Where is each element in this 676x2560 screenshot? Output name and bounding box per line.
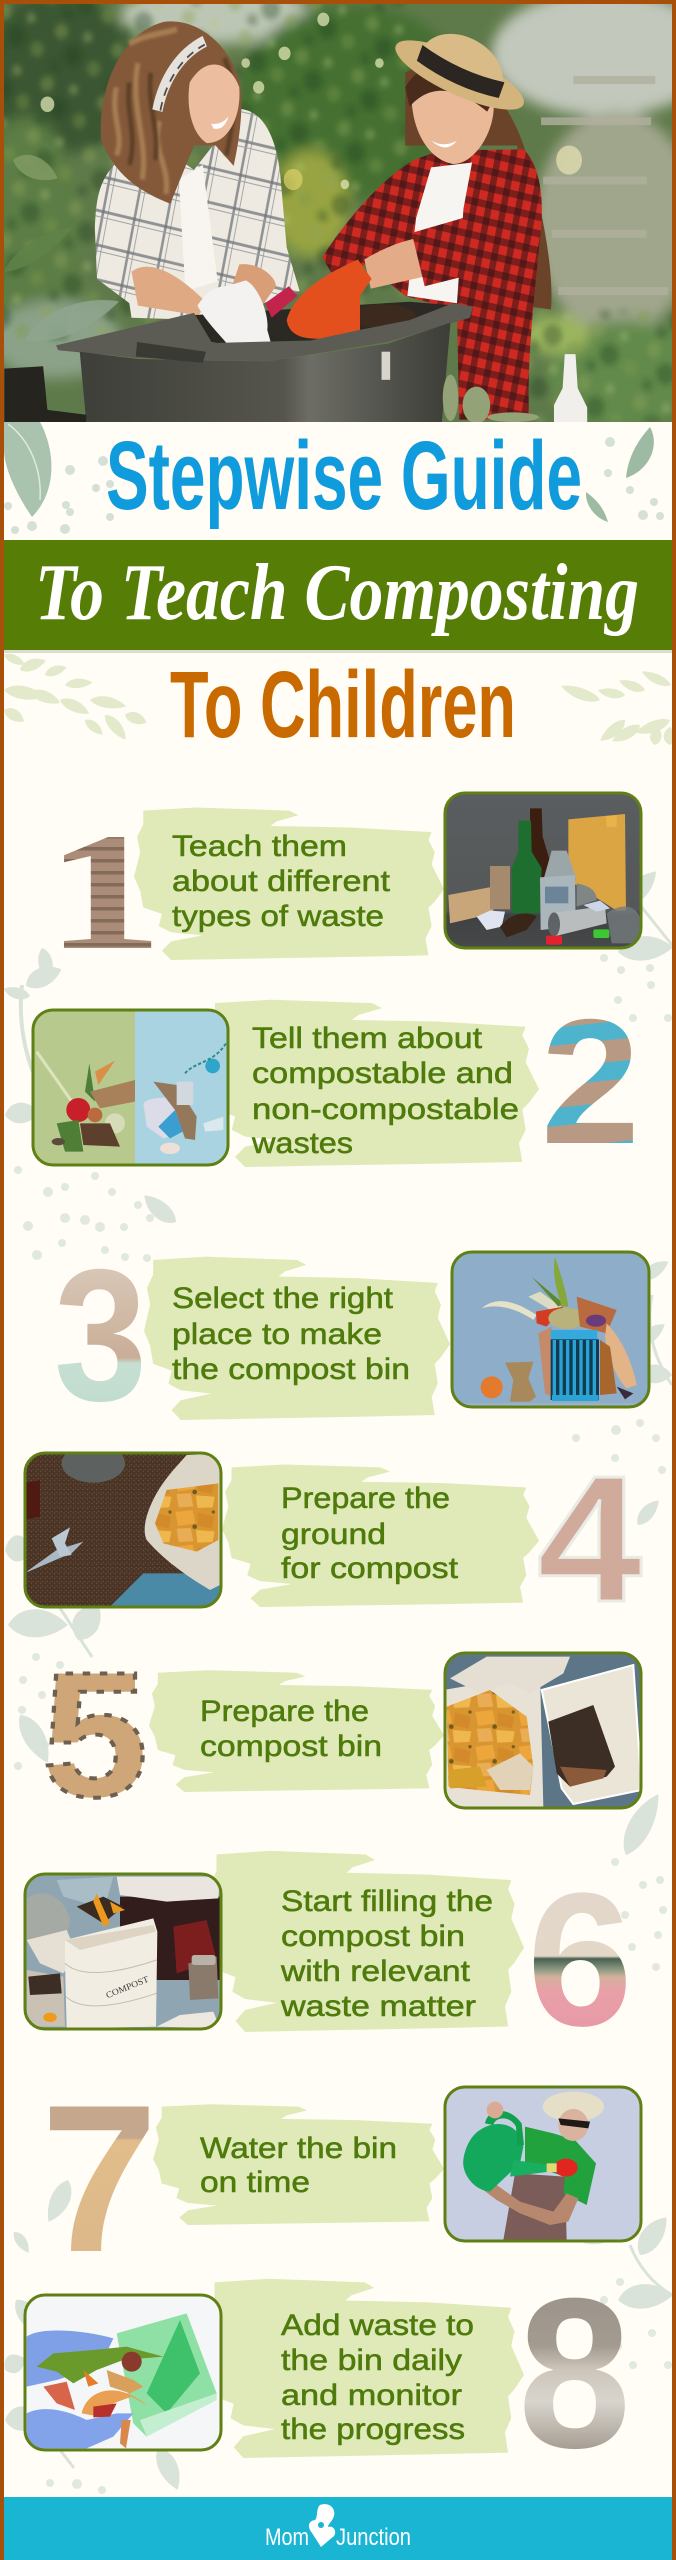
number 2: 2 [541,982,640,1181]
brush stroke [134,808,444,960]
brush stroke [205,2279,524,2458]
step text: and monitor [281,2379,462,2412]
footer [4,2497,672,2560]
photo: woman with watering can [443,2085,643,2245]
step text: waste matter [280,1990,476,2023]
plants and spray bottle [443,374,539,423]
step text: the compost bin [172,1353,410,1386]
orange glove [287,260,372,339]
heading: To Children: To Children [170,652,516,758]
step text [172,1282,410,1386]
step text [251,1022,519,1160]
woman t-shirt [179,165,218,291]
step text [281,2309,474,2446]
tub interior [190,302,457,352]
step text: types of waste [172,900,384,933]
panel: step 2 [32,1000,633,1167]
step text [172,830,391,933]
step text: Prepare the [200,1695,369,1728]
photo: soil and food sack [23,1444,223,1610]
photo: food scraps in a blue bin [450,1250,650,1410]
panel: step 3 [54,1230,650,1440]
step text: Teach them [172,830,347,863]
woman headband [157,41,205,111]
step text: compostable and [252,1057,513,1090]
step text: compost bin [281,1920,465,1953]
brush stroke [205,1000,539,1167]
left machine [4,366,86,422]
step text: Water the bin [200,2132,397,2165]
number 8: 8 [518,2254,631,2493]
girl hair [405,64,551,309]
brush stroke [144,1257,450,1420]
step text: with relevant [280,1955,471,1988]
brush stroke [207,1851,524,2032]
girl hat [395,34,524,110]
panel: step 4 [23,1439,642,1640]
step text: ground [281,1518,386,1551]
photo: food waste and bin of compost [443,1650,643,1810]
girl arm [364,238,425,289]
decorative leaves and dots [0,865,674,2494]
number 1: 1 [45,799,163,985]
step text [200,1695,382,1763]
step text: non-compostable [252,1093,519,1126]
number 5: 5 [42,1636,148,1835]
photo: assorted waste [443,790,643,950]
step text: Start filling the [281,1885,493,1918]
photo: filling a compost bin: COMPOST [104,1974,151,2000]
girl face [412,87,494,164]
trowel [265,286,297,318]
brush stroke [149,1670,444,1792]
step text [200,2132,397,2199]
number 3: 3 [54,1230,147,1440]
step text: the progress [281,2413,465,2446]
step text [281,1482,459,1585]
fern leaves [2,651,675,747]
hero photo: mother and daughter composting in a garden [0,0,676,427]
brush stroke [222,1464,539,1607]
number 4: 4 [537,1439,642,1640]
step text: place to make [172,1318,382,1351]
step text: Prepare the [281,1482,450,1515]
decorative banner leaves [4,437,664,534]
step text: Tell them about [252,1022,483,1055]
panel: step 7 [50,2086,642,2251]
logo text: Junction [336,2524,411,2551]
white gloves [197,280,272,345]
step text [280,1885,493,2023]
brush stroke [153,2104,444,2225]
step text: on time [200,2166,310,2199]
step text: for compost [281,1552,459,1585]
photo: gloved hands with scraps and green bag [23,2295,223,2452]
photo: compostable and non-compostable items [30,1007,232,1167]
girl shirt [322,149,542,420]
woman shirt [95,109,300,320]
green band [4,540,672,653]
title banner [4,421,664,534]
step text: compost bin [200,1730,382,1763]
woman hair [101,21,242,204]
logo text: Mom [265,2524,309,2551]
panel: step 1 [45,790,643,985]
step text: wastes [251,1127,353,1160]
step text: Select the right [172,1282,394,1315]
step text: Add waste to [281,2309,474,2342]
logo icon [309,2504,335,2547]
woman arms [131,267,207,315]
step text: about different [172,865,391,898]
panel: step 8 [23,2254,631,2493]
number 6: 6 [527,1854,633,2066]
step text: the bin daily [281,2344,462,2377]
number 7: 7 [41,2061,158,2296]
panel: step 6 [24,1850,626,2032]
panel: step 5 [45,1652,642,1810]
children banner [2,651,675,758]
woman face [189,65,240,143]
tub [56,303,473,361]
girl t-shirt [407,163,472,303]
photo: filling a compost bin [23,1873,223,2030]
